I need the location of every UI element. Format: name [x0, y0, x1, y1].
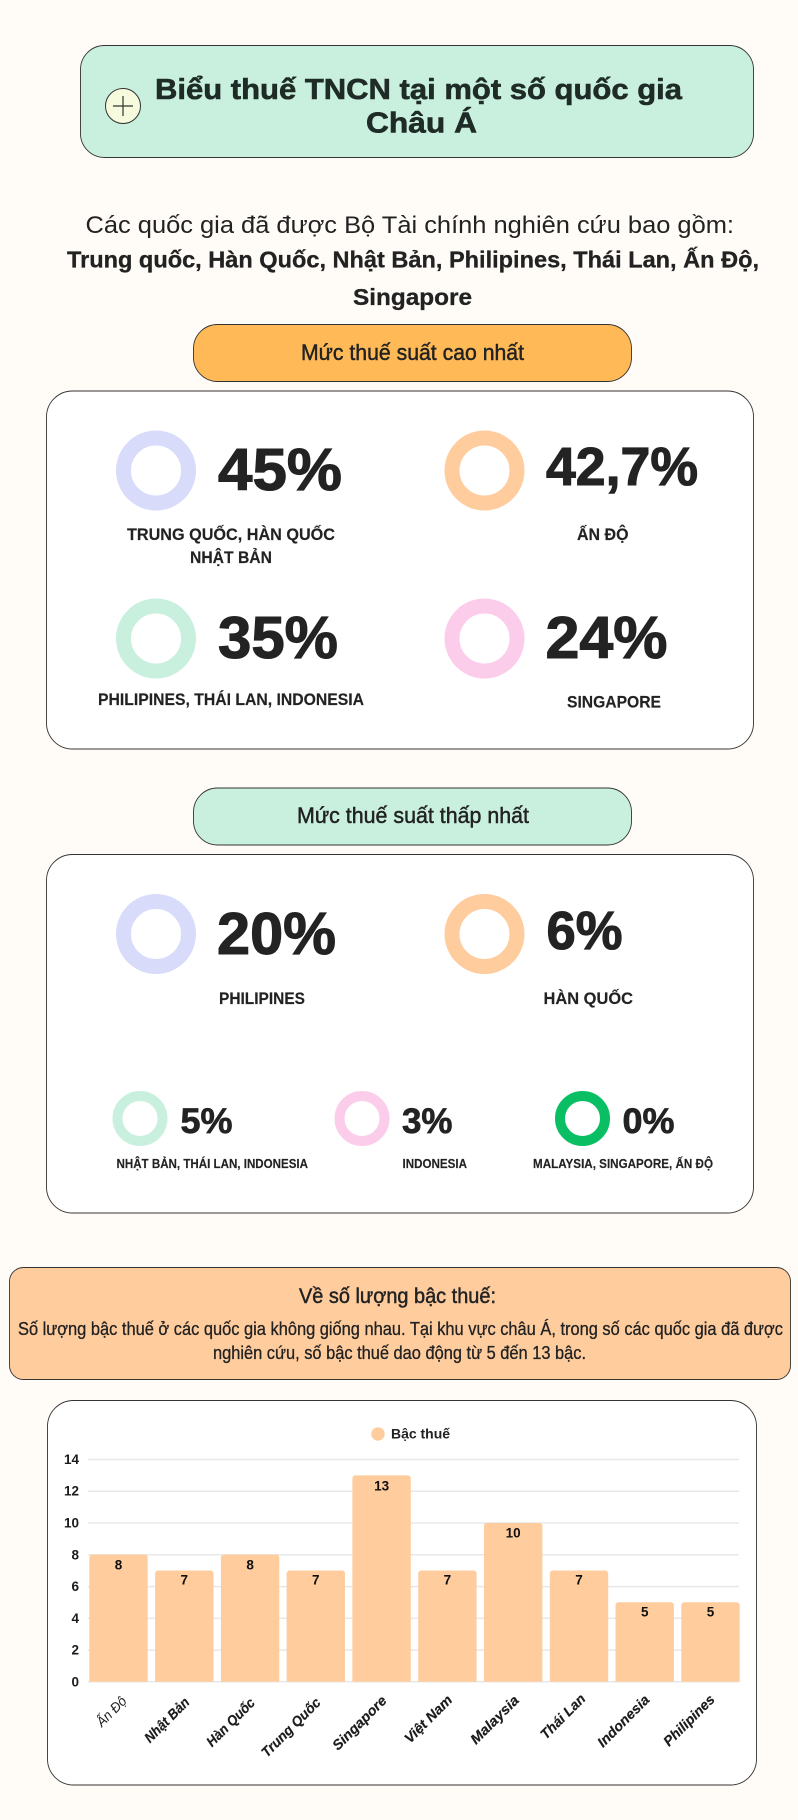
- bar values: 10: [506, 1526, 521, 1540]
- stat: 6%: [452, 901, 633, 1008]
- heading pill: highest rate: Mức thuế suất cao nhất: [301, 340, 524, 365]
- stat: 45%: 45%: [218, 437, 342, 503]
- stat: 3%: 3%: [402, 1102, 452, 1141]
- intro text: Singapore: [353, 284, 472, 310]
- y axis and grid: 12: [64, 1484, 79, 1499]
- stat: 20%: PHILIPINES: [219, 990, 305, 1008]
- stat: 42,7%: ẤN ĐỘ: [577, 525, 629, 544]
- y axis and grid: 6: [71, 1579, 79, 1594]
- y axis and grid: 8: [71, 1547, 79, 1562]
- stat: 24%: [452, 605, 668, 712]
- x axis labels: Việt Nam: [401, 1692, 455, 1746]
- y axis and grid: 2: [71, 1643, 79, 1658]
- panel: highest rates: [46, 391, 754, 749]
- stat: 20%: [124, 901, 336, 1008]
- bar values: 7: [312, 1572, 320, 1588]
- x axis labels: Singapore: [329, 1692, 390, 1753]
- stat: 42,7%: [452, 437, 698, 544]
- stat: 35%: [98, 605, 364, 709]
- stat: 20%: 20%: [217, 901, 336, 967]
- stat: 5%: [116, 1096, 309, 1171]
- title text: Biểu thuế TNCN tại một số quốc gia: [155, 74, 683, 106]
- stat: 3%: [340, 1096, 468, 1171]
- bar values: 7: [444, 1572, 451, 1588]
- x axis labels: Nhật Bản: [141, 1694, 192, 1746]
- stat: 45%: NHẬT BẢN: [190, 548, 272, 567]
- bar values: 7: [575, 1572, 583, 1588]
- bar values: 5: [707, 1604, 715, 1620]
- stat: 5%: NHẬT BẢN, THÁI LAN, INDONESIA: [116, 1156, 309, 1171]
- intro text: Các quốc gia đã được Bộ Tài chính nghiên cứu bao gồm:: [86, 212, 734, 239]
- heading pill: lowest rate: Mức thuế suất thấp nhất: [297, 803, 529, 828]
- stat: 0%: MALAYSIA, SINGAPORE, ẤN ĐỘ: [533, 1156, 713, 1171]
- bar values: 8: [246, 1558, 254, 1572]
- stat: 24%: SINGAPORE: [567, 694, 661, 712]
- x axis labels: Indonesia: [594, 1691, 653, 1750]
- y axis and grid: 10: [64, 1516, 79, 1530]
- y axis and grid: [64, 1452, 739, 1689]
- heading pill: highest rate: [194, 324, 632, 382]
- bars: [89, 1475, 740, 1682]
- stat: 0%: [533, 1096, 713, 1171]
- bar values: 7: [181, 1572, 188, 1588]
- x axis labels: Hàn Quốc: [203, 1694, 258, 1750]
- title text: [155, 74, 683, 140]
- bar values: 8: [115, 1558, 123, 1572]
- y axis and grid: 14: [64, 1452, 79, 1467]
- stat: 35%: 35%: [218, 605, 338, 671]
- panel: lowest rates: [46, 854, 754, 1213]
- x axis labels: Trung Quốc: [258, 1694, 324, 1760]
- stat: 6%: 6%: [546, 901, 622, 961]
- x axis labels: Ấn Độ: [91, 1692, 130, 1730]
- stat: 6%: HÀN QUỐC: [544, 988, 633, 1008]
- x axis labels: [91, 1691, 718, 1760]
- title text: Châu Á: [366, 106, 477, 140]
- stat: 0%: 0%: [622, 1102, 674, 1141]
- y axis and grid: 0: [71, 1674, 79, 1689]
- x axis labels: Thái Lan: [537, 1691, 588, 1742]
- y axis and grid: 4: [71, 1611, 79, 1626]
- x axis labels: Philipines: [660, 1691, 718, 1749]
- callout: number of tax brackets: nghiên cứu, số bậc thuế dao động từ 5 đến 13 bậc.: [213, 1343, 586, 1363]
- bar values: 13: [374, 1478, 390, 1494]
- title banner: [80, 46, 754, 158]
- heading pill: lowest rate: [194, 788, 632, 845]
- intro text: [67, 212, 759, 310]
- callout: number of tax brackets: [10, 1268, 790, 1380]
- panel: bar chart: [48, 1400, 756, 1785]
- stat: 3%: INDONESIA: [402, 1156, 468, 1171]
- x axis labels: Malaysia: [467, 1692, 522, 1747]
- stat: 35%: PHILIPINES, THÁI LAN, INDONESIA: [98, 690, 364, 709]
- stat: 45%: [124, 437, 342, 567]
- callout: number of tax brackets: Về số lượng bậc thuế:: [299, 1285, 496, 1308]
- stat: 5%: 5%: [180, 1102, 232, 1141]
- intro text: Trung quốc, Hàn Quốc, Nhật Bản, Philipines, Thái Lan, Ấn Độ,: [67, 246, 759, 272]
- chart legend: Bậc thuế: [391, 1426, 451, 1442]
- bar values: [115, 1478, 715, 1620]
- stat: 42,7%: 42,7%: [546, 437, 698, 497]
- stat: 45%: TRUNG QUỐC, HÀN QUỐC: [127, 524, 335, 544]
- icon: plus circle: [106, 88, 140, 124]
- bar values: 5: [641, 1604, 649, 1620]
- stat: 24%: 24%: [546, 605, 668, 671]
